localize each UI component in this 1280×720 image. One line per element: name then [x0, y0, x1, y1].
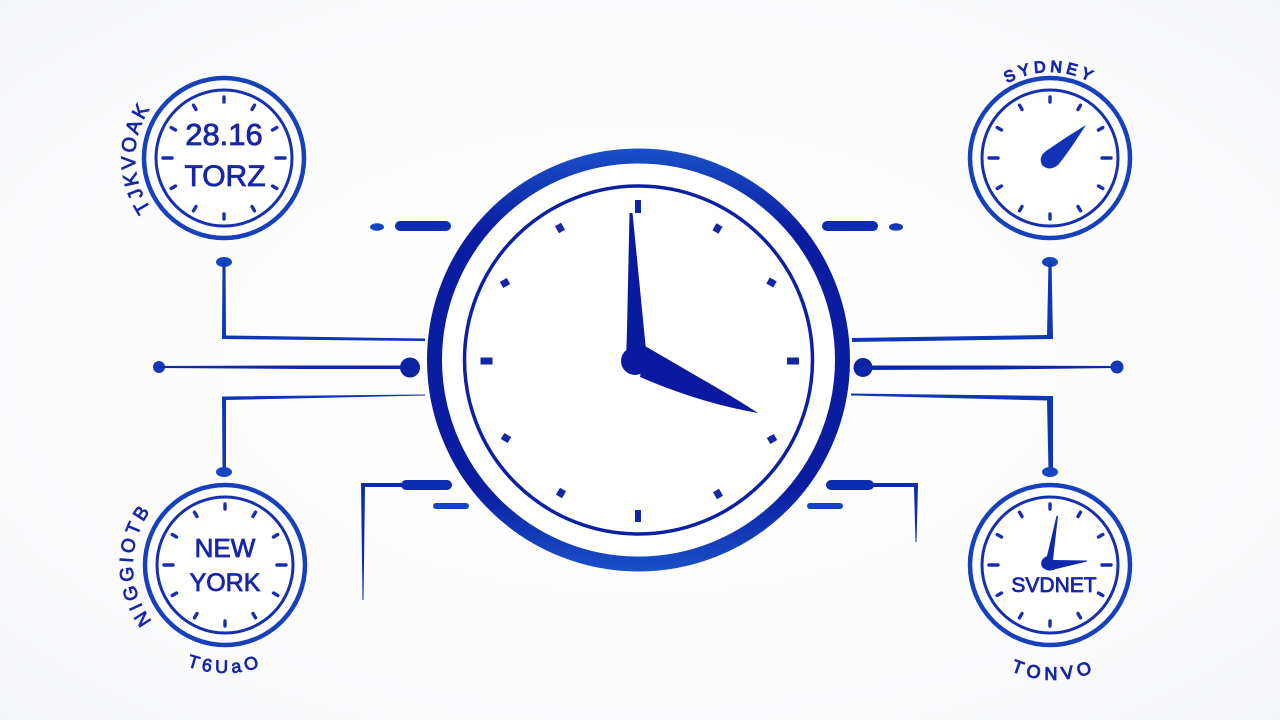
inner ring: [464, 186, 812, 534]
ticks: [163, 97, 285, 219]
clock: top right: [968, 60, 1132, 240]
ticks: [989, 504, 1111, 626]
rings: [144, 78, 304, 238]
hub: [621, 347, 649, 375]
city name: NEW: [195, 533, 256, 563]
curved label: SYDNEY: [1004, 60, 1095, 82]
connector: top right: [852, 257, 1058, 342]
curved label left: NIGGIOTB: [119, 506, 152, 628]
rings: [970, 485, 1130, 645]
clock: bottom left: [119, 482, 308, 674]
hour hand: [640, 346, 758, 413]
dash: top right small: [889, 223, 903, 231]
connector: middle right: [854, 358, 1124, 377]
city name second line: YORK: [190, 569, 261, 597]
time reading: 28.16: [185, 117, 263, 152]
dash: top left long: [395, 221, 451, 231]
zone reading: TORZ: [184, 160, 266, 193]
ticks: [164, 504, 286, 626]
connector: bottom left bracket: [361, 480, 452, 600]
connector: middle left: [153, 358, 420, 378]
rings: [970, 78, 1130, 238]
dash: right lower: [807, 503, 843, 509]
rings: [145, 485, 305, 645]
clock: bottom right: [968, 482, 1132, 680]
hour ticks: [480, 200, 799, 522]
city name: SVDNET: [1011, 574, 1097, 597]
connector: bottom right bracket: [826, 480, 918, 542]
dash: left lower: [433, 503, 469, 509]
outer ring: [434, 156, 842, 564]
curved label bottom: T6UaO: [190, 654, 258, 674]
clock: top left: [120, 76, 306, 240]
minute hand: [626, 213, 646, 362]
dash: top left small: [370, 223, 384, 231]
curved label: TONVO: [1014, 658, 1091, 680]
dash: top right long: [822, 221, 878, 231]
curved label: TJKVOAK: [120, 102, 150, 216]
connector: top left: [216, 257, 425, 341]
central clock: [434, 156, 842, 564]
connector: lower right: [851, 394, 1058, 477]
hands: [1041, 516, 1087, 571]
connector: lower left: [216, 394, 425, 477]
dial pointer: [1041, 125, 1086, 168]
ticks: [989, 97, 1111, 219]
